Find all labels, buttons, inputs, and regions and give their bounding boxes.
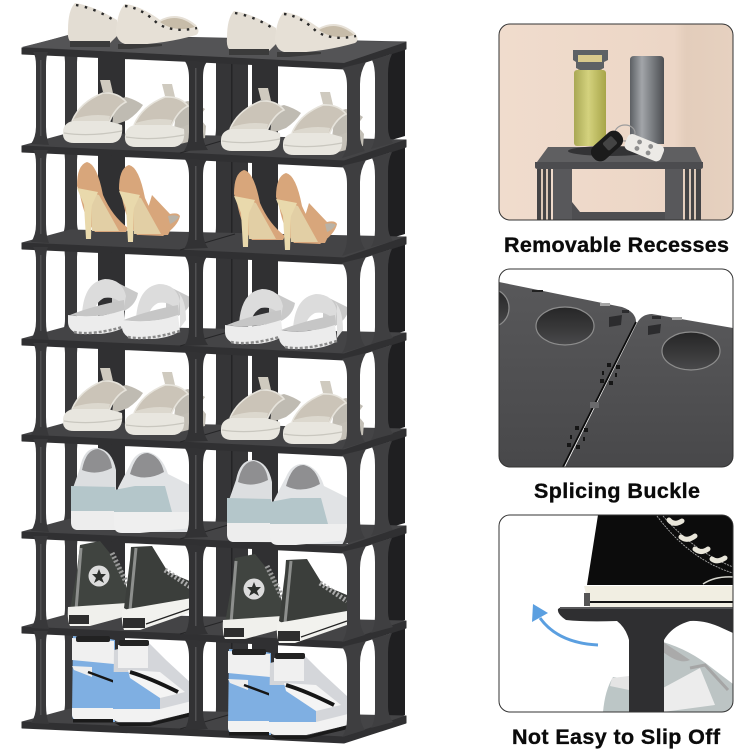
row 3: nude heels	[77, 162, 337, 250]
front rack posts	[31, 52, 393, 737]
shoe rack with shoes	[22, 3, 406, 743]
icon: steel bottle	[630, 56, 664, 144]
panel: splicing buckle	[473, 269, 733, 467]
row 5: beige slides	[63, 368, 364, 444]
heading: removable recesses: Removable Recesses	[504, 233, 729, 257]
icon: gold glass bottle	[573, 50, 608, 146]
heading: splicing buckle: Splicing Buckle	[534, 479, 700, 503]
row 1: cream flats	[68, 3, 357, 57]
black high-top shoe	[584, 515, 733, 610]
curved blue arrow	[532, 604, 598, 645]
square slots	[532, 290, 682, 335]
left plate	[499, 282, 636, 467]
panel: not easy to slip off	[499, 515, 733, 712]
row 8: blue high tops	[72, 636, 348, 739]
grey sneaker below	[603, 642, 733, 712]
circular recesses	[500, 290, 721, 371]
rear rack posts	[60, 44, 405, 725]
shelf edge and post	[558, 607, 733, 712]
icon: white remote	[624, 134, 664, 162]
heading: not easy to slip off: Not Easy to Slip Off	[512, 725, 721, 749]
icon: key ring	[615, 125, 635, 141]
row 4: grey slides	[68, 279, 349, 349]
icon: car key fob	[591, 130, 624, 162]
buckles	[567, 363, 620, 449]
row 6: grey sneakers	[71, 448, 348, 545]
right plate	[565, 314, 733, 467]
seam	[563, 322, 636, 467]
panel: removable recesses	[499, 24, 733, 220]
row 7: dark high tops	[68, 541, 347, 643]
icon: small shelf with legs	[535, 146, 703, 220]
row 2: beige slides	[63, 80, 364, 155]
top shelf surface	[22, 35, 406, 63]
rack shelves	[22, 35, 406, 743]
